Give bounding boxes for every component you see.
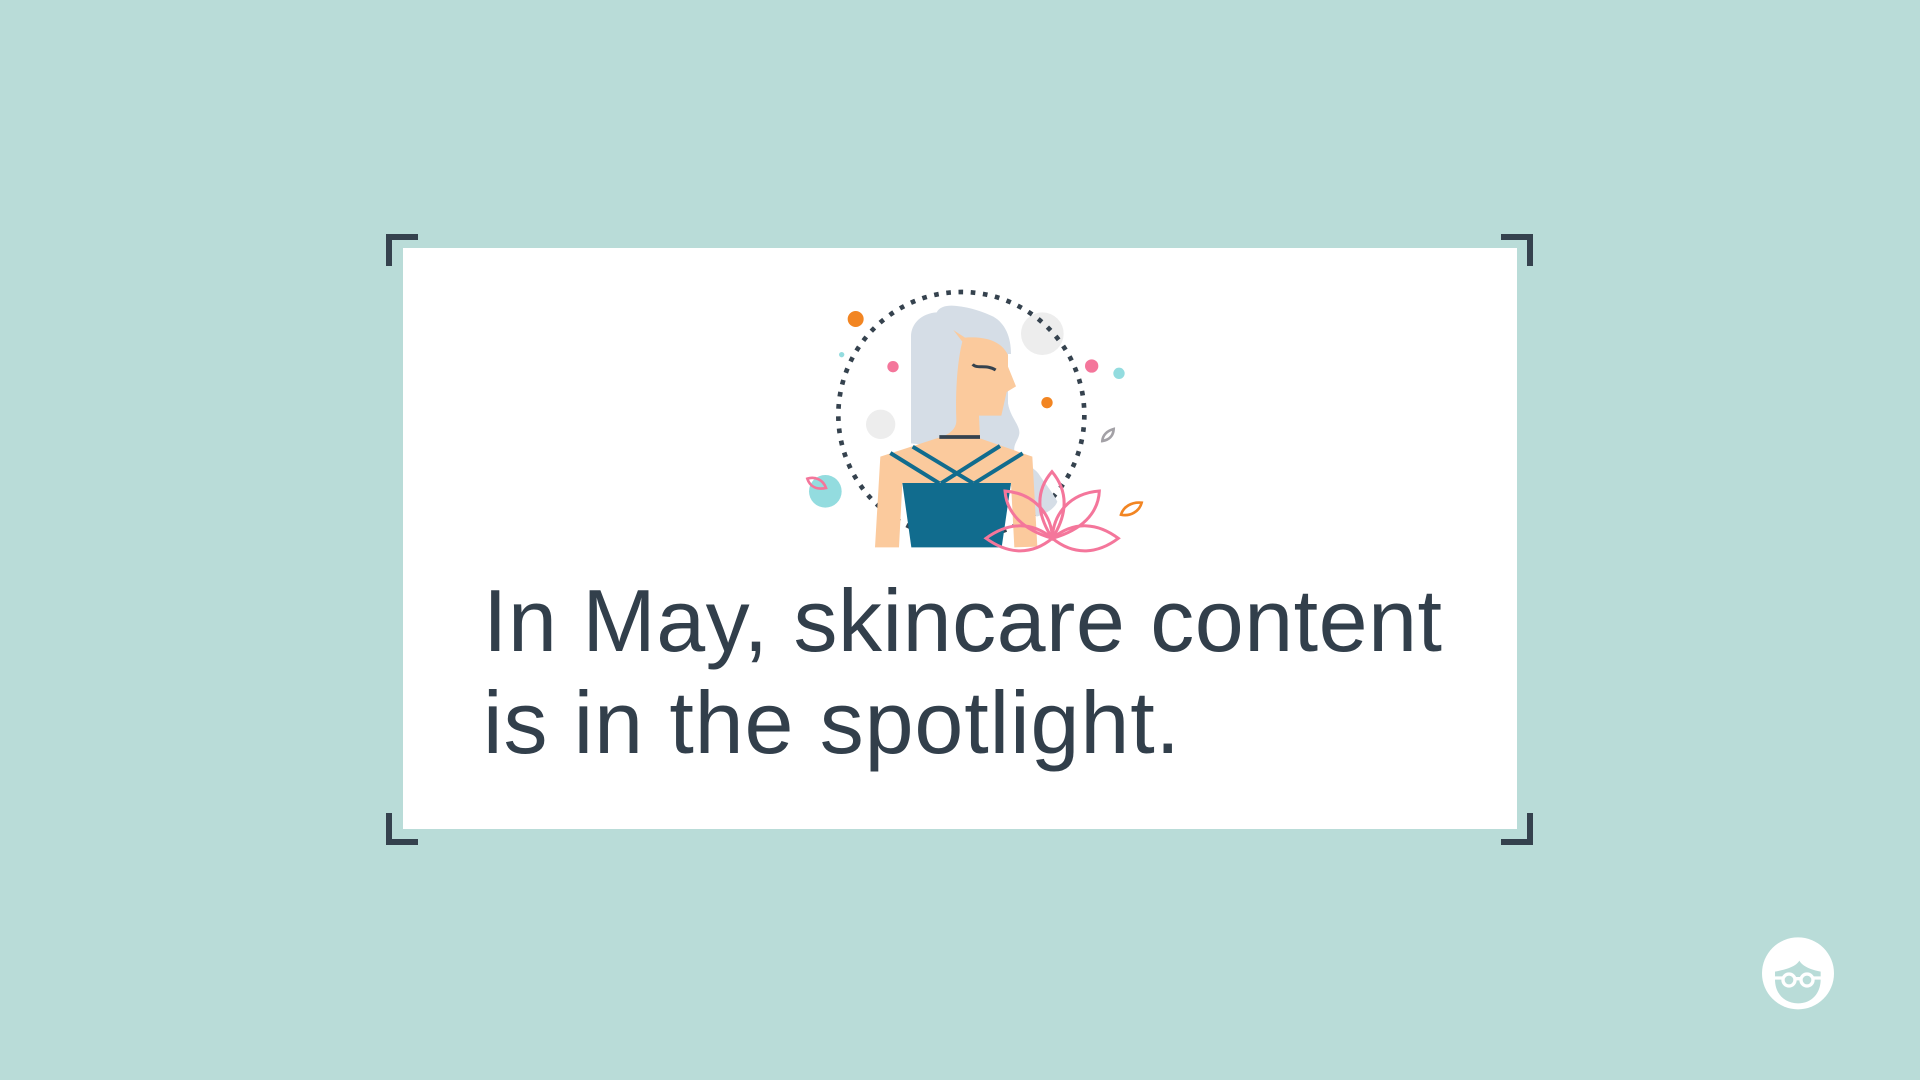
dress straps	[890, 446, 1023, 483]
headline	[483, 571, 1442, 772]
panel: white card	[403, 248, 1517, 829]
face and body	[875, 330, 1037, 547]
leaf: gray	[1102, 429, 1114, 441]
hair	[911, 306, 1057, 517]
necklace	[939, 431, 980, 442]
decorative dots and circles	[809, 311, 1125, 508]
leaf: pink	[807, 478, 826, 489]
lotus outline	[986, 472, 1118, 551]
corner bracket: top right	[1501, 234, 1533, 266]
illustration: woman with lotus	[807, 292, 1142, 551]
leaf: orange	[1121, 503, 1142, 515]
dress	[902, 483, 1011, 547]
logo: face with glasses	[1762, 937, 1834, 1009]
corner bracket: bottom left	[386, 813, 418, 845]
dotted ring	[838, 292, 1084, 538]
closed eye	[973, 364, 996, 370]
headline line 2: is in the spotlight.	[483, 673, 1180, 772]
headline line 1: In May, skincare content	[483, 571, 1442, 670]
corner bracket: top left	[386, 234, 418, 266]
glasses	[1773, 974, 1823, 986]
corner bracket: bottom right	[1501, 813, 1533, 845]
